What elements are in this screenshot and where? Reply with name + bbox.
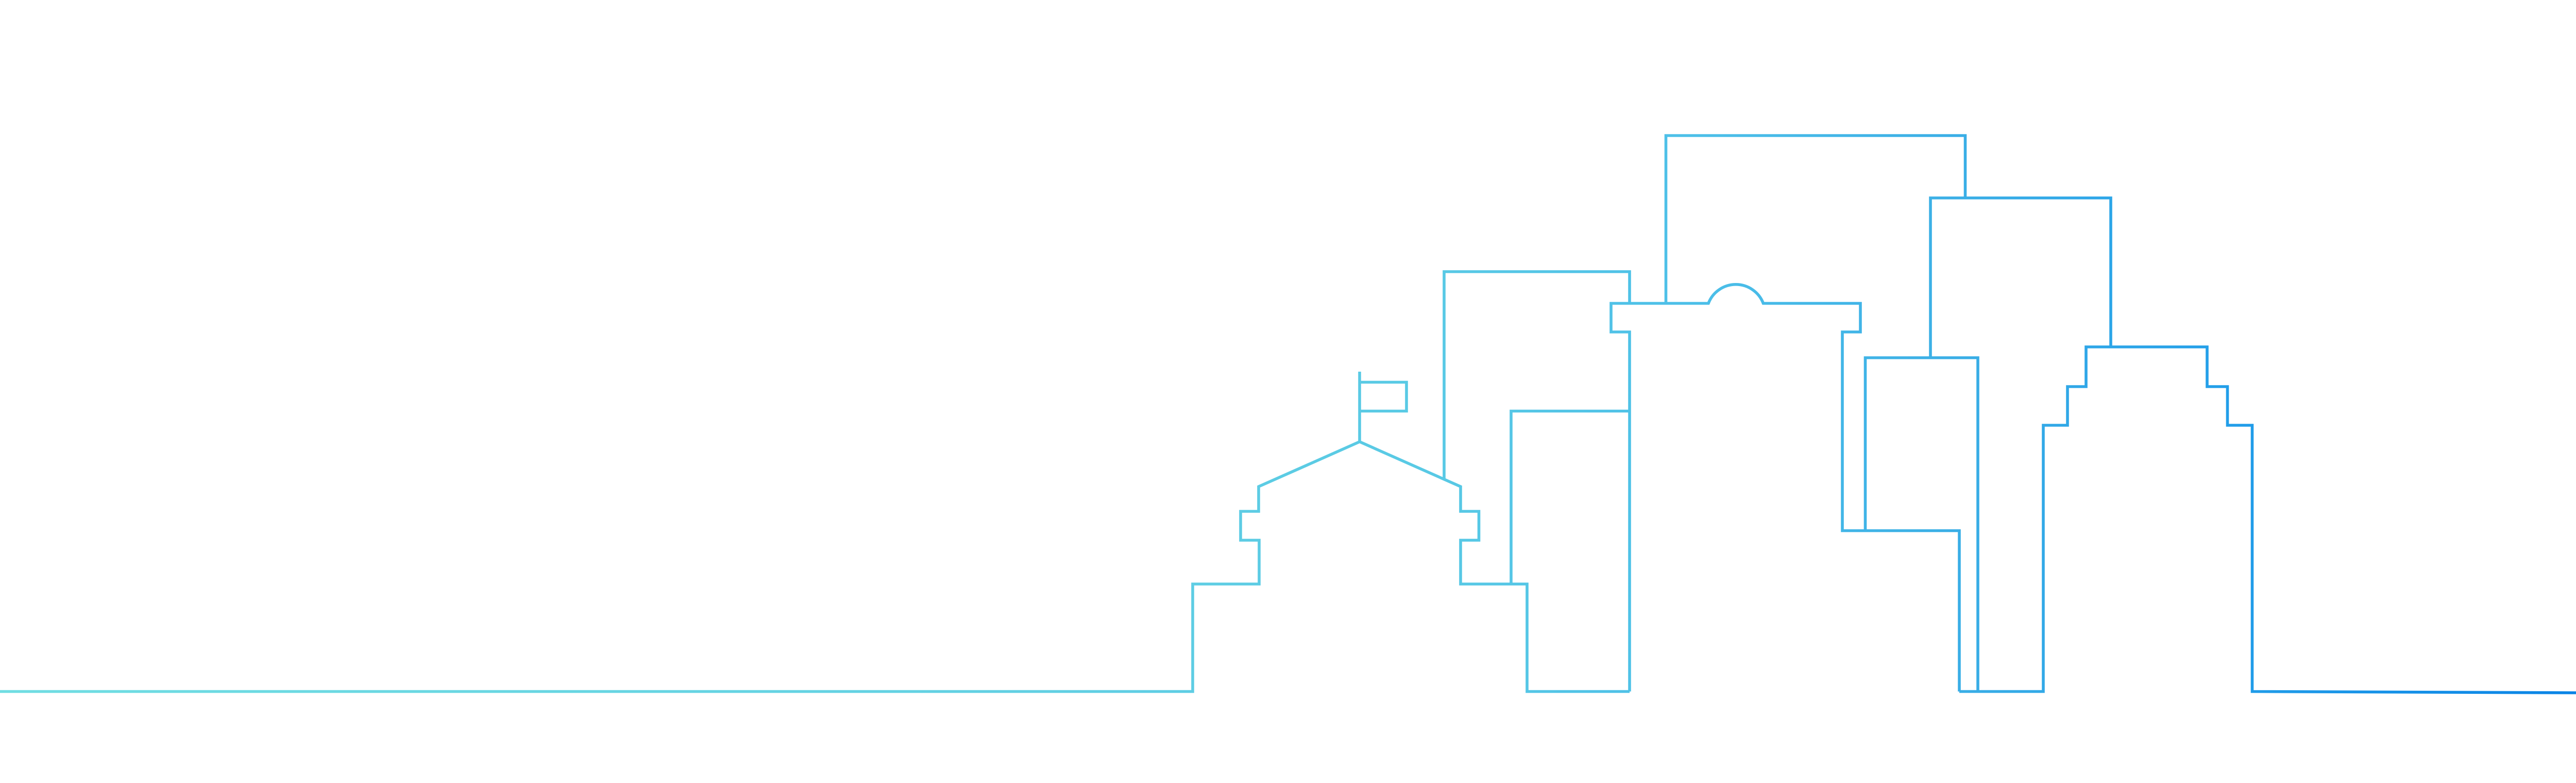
ground line and domed building on the left bbox=[0, 442, 1630, 692]
central building with arched crown bbox=[1611, 285, 1959, 692]
stepped skyscraper and ground line on the right bbox=[1959, 347, 2576, 693]
tall building behind dome bbox=[1444, 272, 1630, 479]
right rear tower bbox=[1930, 198, 2111, 358]
upper rear tower bbox=[1666, 136, 1965, 303]
mid block building bbox=[1865, 358, 1978, 692]
front building rectangle bbox=[1511, 411, 1630, 584]
icon: flag on pole bbox=[1360, 372, 1406, 442]
